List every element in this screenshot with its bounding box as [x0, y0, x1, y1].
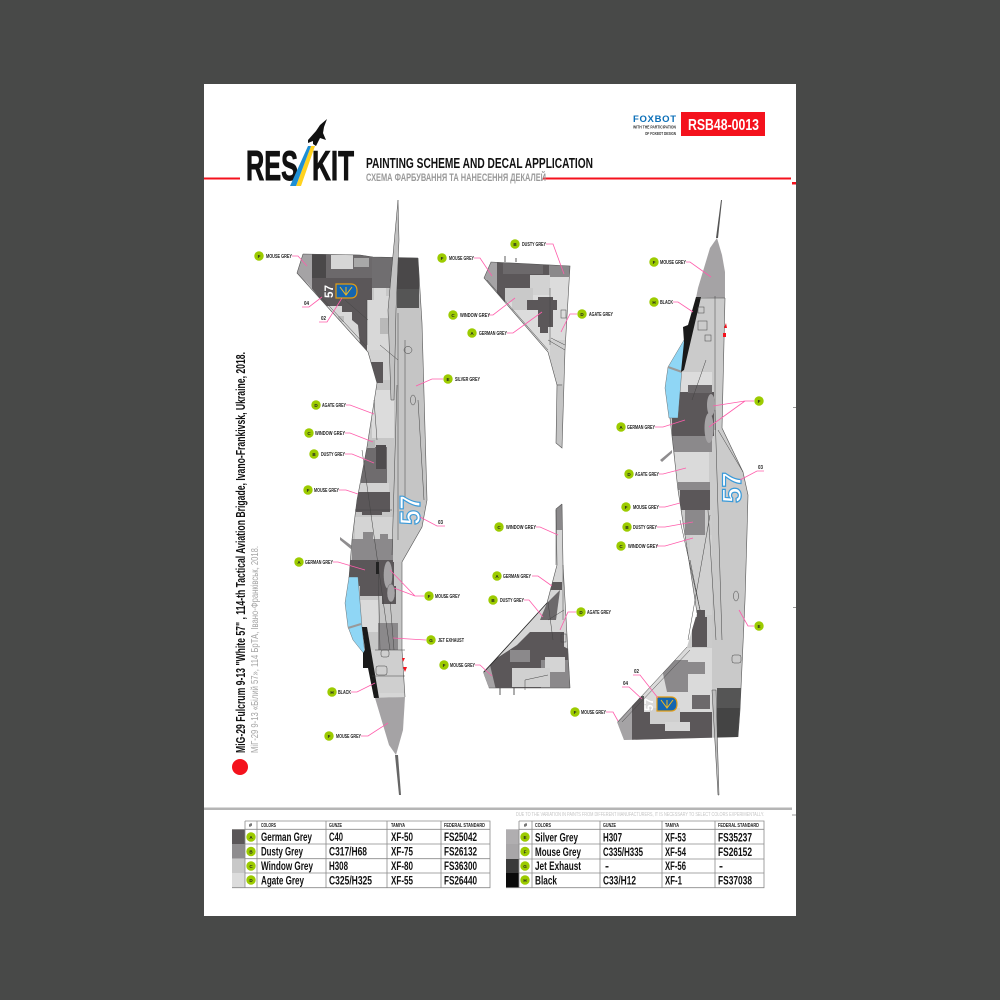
callout: F mouse grey: F [441, 256, 444, 261]
row C [246, 859, 477, 873]
row C: XF-80 [391, 859, 413, 873]
swatches [232, 829, 245, 888]
side ticks [793, 407, 796, 608]
callout: F mouse grey: F [328, 734, 331, 739]
row C: C [249, 864, 253, 869]
callout: 02: 02 [634, 669, 639, 675]
row E: Silver Grey [535, 830, 578, 844]
callout: H black: BLACK [338, 690, 351, 696]
row F [520, 845, 752, 859]
header row: FEDERAL STANDARD [718, 823, 759, 829]
row A: German Grey [261, 830, 312, 844]
page sheet [204, 84, 796, 916]
callout: A german grey: A [297, 560, 301, 565]
row E: E [523, 835, 527, 840]
icon: jet silhouette [308, 119, 327, 146]
foxbot credit: WITH THE PARTICIPATION [633, 124, 676, 130]
logo: ResKit: KIT [312, 142, 354, 189]
callout: F mouse grey: MOUSE GREY [449, 256, 474, 262]
row H: Black [535, 874, 557, 888]
row E: FS35237 [718, 830, 752, 844]
callout: D agate grey: AGATE GREY [589, 312, 613, 318]
callout: E silver grey: E [446, 377, 450, 382]
callout: C window grey: C [619, 544, 623, 549]
row A: C40 [329, 830, 343, 844]
row A: A [249, 835, 253, 840]
heading: PAINTING SCHEME AND DECAL APPLICATION [366, 156, 593, 172]
outline [484, 262, 570, 448]
callout: A german grey [492, 571, 552, 586]
header row: FEDERAL STANDARD [444, 823, 485, 829]
callout: A german grey: A [495, 574, 499, 579]
callout: H black [327, 683, 375, 697]
callout: F mouse grey [390, 570, 460, 601]
ventral fin [340, 537, 352, 550]
callout: H black: H [652, 300, 656, 305]
callout: D agate grey: AGATE GREY [635, 472, 659, 478]
callout: A german grey: A [470, 331, 474, 336]
row H: C33/H12 [603, 874, 636, 888]
callout: A german grey: GERMAN GREY [479, 331, 507, 337]
disclaimer: DUE TO THE VARIATION IN PAINTS FROM DIFFERENT MANUFACTURERS, IT IS NECESSARY TO SELECT COLORS EXPERIMENTALLY. [516, 812, 764, 818]
table: colors A-D [232, 821, 490, 888]
callout: 02 [319, 298, 342, 322]
callout: F mouse grey: MOUSE GREY [266, 254, 293, 260]
callout: F mouse grey [439, 660, 492, 676]
aircraft: bottom wing view [480, 500, 575, 695]
header row: GUNZE [329, 823, 342, 829]
callout: D agate grey: D [627, 472, 631, 477]
callout: C window grey: C [497, 525, 501, 530]
header row: # [524, 823, 527, 829]
callout: E silver grey [416, 374, 480, 386]
aircraft title: MiG-29 Fulcrum 9-13 "White 57" , 114-th Tactical Aviation Brigade, Ivano-Frankivsk, Ukraine, 2018. [233, 352, 248, 753]
callout: C window grey [448, 298, 515, 320]
row C: H308 [329, 859, 348, 873]
foxbot credit [633, 114, 676, 136]
callout: F mouse grey: F [653, 260, 656, 265]
callout: D agate grey: D [580, 312, 584, 317]
row A [246, 830, 477, 844]
callout: 04: 04 [304, 301, 309, 307]
canopy frame [348, 624, 361, 628]
callout: F mouse grey: MOUSE GREY [314, 488, 339, 494]
logo: ResKit [246, 119, 354, 189]
panel lines [618, 296, 743, 722]
logo: ResKit: RES [246, 142, 298, 189]
callout: B dusty grey: DUSTY GREY [321, 452, 345, 458]
decal trident [336, 284, 357, 298]
callout: F mouse grey: MOUSE GREY [435, 594, 460, 600]
callout: D agate grey: AGATE GREY [587, 610, 611, 616]
callout: A german grey: GERMAN GREY [503, 574, 531, 580]
callout: A german grey [616, 420, 685, 432]
outline [489, 504, 570, 688]
callout: D agate grey: D [579, 610, 583, 615]
header row: TAMIYA [391, 823, 405, 829]
row B [246, 844, 477, 858]
header row: GUNZE [603, 823, 616, 829]
callout: G jet exhaust [393, 635, 464, 645]
callout: F mouse grey [649, 257, 711, 277]
row B: XF-75 [391, 844, 413, 858]
row D: FS26440 [444, 874, 477, 888]
row D: XF-55 [391, 874, 413, 888]
header row: # [249, 823, 252, 829]
fin [712, 690, 719, 795]
decal 57 wing: 57 [395, 495, 427, 525]
callout: F mouse grey: MOUSE GREY [450, 663, 475, 669]
callout: F two arrows [709, 396, 764, 427]
callout: A german grey: GERMAN GREY [305, 560, 333, 566]
callout: F mouse grey: F [428, 594, 431, 599]
aircraft: right side view [610, 200, 755, 795]
row B: B [249, 850, 253, 854]
fin [388, 200, 399, 400]
row F: FS26152 [718, 845, 752, 859]
sub heading: СХЕМА ФАРБУВАННЯ ТА НАНЕСЕННЯ ДЕКАЛЕЙ [366, 171, 546, 184]
callout: E [739, 610, 764, 631]
callout: A german grey [467, 312, 542, 338]
row E [520, 830, 752, 844]
row D: Agate Grey [261, 874, 304, 888]
foxbot credit: FOXBOT [633, 114, 676, 125]
row B: FS26132 [444, 844, 477, 858]
callout: G jet exhaust: G [429, 638, 433, 643]
table: colors E-H [506, 821, 764, 888]
aircraft: left side view [290, 200, 430, 795]
row H: H [523, 878, 527, 883]
row D [246, 874, 477, 888]
callout: 02 [633, 669, 658, 698]
callout: C window grey: C [307, 431, 311, 436]
callout: B dusty grey: B [625, 525, 629, 530]
callout: F mouse grey: F [625, 505, 628, 510]
callout: A german grey: GERMAN GREY [627, 425, 655, 431]
callout: C window grey: WINDOW GREY [315, 431, 346, 437]
canopy frame [668, 367, 682, 372]
row C: FS36300 [444, 859, 477, 873]
callout: E silver grey: SILVER GREY [455, 377, 480, 383]
callout: D agate grey [560, 607, 611, 630]
decal trident [657, 697, 677, 711]
callout: 04 [302, 297, 322, 307]
swatches [506, 829, 519, 888]
callout: F mouse grey: F [443, 663, 446, 668]
row A: FS25042 [444, 830, 477, 844]
callout: F mouse grey: MOUSE GREY [660, 260, 687, 266]
callout: 03: 03 [438, 520, 443, 526]
callout: D agate grey: AGATE GREY [322, 403, 346, 409]
fuselage [617, 297, 748, 740]
row D: C325/H325 [329, 874, 372, 888]
row B: Dusty Grey [261, 844, 303, 858]
pitot probe [395, 755, 401, 795]
callout: F mouse grey: MOUSE GREY [336, 734, 361, 740]
callout: H black: H [330, 690, 334, 695]
fuselage outline [670, 298, 748, 737]
callout: B dusty grey [488, 595, 543, 617]
decal 57 tail: 57 [322, 285, 336, 298]
callout: C window grey [616, 538, 693, 551]
row G: - [605, 859, 609, 873]
row F: XF-54 [665, 845, 686, 859]
fuselage [290, 250, 430, 700]
callout: F two arrows: F [758, 399, 761, 404]
ventral fin [660, 450, 672, 462]
callout: 03 [420, 517, 445, 526]
callout: F mouse grey: MOUSE GREY [581, 710, 606, 716]
nose cone [375, 697, 405, 755]
row F: F [524, 850, 527, 854]
header rules [204, 178, 796, 184]
row E: XF-53 [665, 830, 686, 844]
decal 57 wing: 57 [717, 472, 747, 503]
callout: B dusty grey: B [491, 598, 495, 603]
callout: B dusty grey [510, 239, 564, 274]
callout: F mouse grey [570, 707, 618, 721]
callout: F mouse grey: F [258, 254, 261, 259]
callout: C window grey: WINDOW GREY [506, 525, 537, 531]
header row [249, 823, 485, 829]
decal 57 tail: 57 [642, 698, 656, 711]
callout: B dusty grey [309, 449, 374, 463]
row G: Jet Exhaust [535, 859, 581, 873]
callout: B dusty grey: DUSTY GREY [500, 598, 524, 604]
row F: Mouse Grey [535, 845, 581, 859]
row A: XF-50 [391, 830, 413, 844]
row F: C335/H335 [603, 845, 643, 859]
callout: F mouse grey: F [574, 710, 577, 715]
black anti-glare strip [362, 627, 379, 698]
callout: 04 [622, 681, 642, 699]
callout: B dusty grey: DUSTY GREY [633, 525, 657, 531]
callout: C window grey: C [451, 313, 455, 318]
aircraft: top wing view [484, 256, 570, 448]
callout: F mouse grey: MOUSE GREY [633, 505, 660, 511]
callout: C window grey [304, 428, 373, 442]
callout: C window grey [494, 522, 558, 535]
callout: D agate grey [561, 309, 613, 332]
product code badge [681, 112, 765, 136]
callout: B dusty grey: B [513, 242, 517, 247]
canopy [665, 340, 688, 418]
row G: - [719, 859, 723, 873]
callout: F mouse grey [621, 502, 680, 512]
row G: G [523, 864, 527, 869]
pitot probe [716, 200, 722, 238]
callout: F mouse grey [254, 251, 307, 266]
row E: H307 [603, 830, 622, 844]
panel lines [320, 296, 424, 676]
callout: F mouse grey [324, 723, 388, 741]
callout: H black: BLACK [660, 300, 673, 306]
callout: F mouse grey [437, 253, 492, 276]
callout: A german grey: A [619, 425, 623, 430]
fuselage outline [297, 254, 427, 697]
callout: C window grey: WINDOW GREY [460, 313, 491, 319]
header row: TAMIYA [665, 823, 679, 829]
foxbot credit: OF FOXBOT DESIGN [645, 131, 676, 136]
callout: F mouse grey [303, 485, 358, 495]
callout: 03: 03 [758, 465, 763, 471]
callout: B dusty grey: B [312, 452, 316, 457]
row D: D [249, 878, 253, 883]
black anti-glare strip [681, 297, 701, 372]
footer rule [204, 808, 796, 816]
header row [524, 823, 759, 829]
row G: XF-56 [665, 859, 686, 873]
callout: 02: 02 [321, 316, 326, 322]
callout: C window grey: WINDOW GREY [628, 544, 659, 550]
aircraft subtitle: МіГ-29 9-13 «Білий 57», 114 БрТА, Івано-Франківськ, 2018. [249, 546, 261, 753]
callout: 04: 04 [623, 681, 628, 687]
callout: F mouse grey: F [307, 488, 310, 493]
callout: E: E [757, 624, 761, 629]
callout: D agate grey [624, 468, 686, 479]
callout: D agate grey [311, 400, 374, 414]
callout: B dusty grey: DUSTY GREY [522, 242, 546, 248]
red marker [232, 759, 248, 775]
callout: 03 [740, 465, 764, 480]
nose cone [696, 238, 725, 298]
callout: A german grey [294, 557, 365, 570]
canopy [345, 577, 365, 655]
header row: COLORS [261, 823, 276, 829]
header row: COLORS [535, 823, 551, 829]
callout: D agate grey: D [314, 403, 318, 408]
row C: Window Grey [261, 859, 313, 873]
row H [520, 874, 752, 888]
row H: FS37038 [718, 874, 752, 888]
row B: C317/H68 [329, 844, 367, 858]
row H: XF-1 [665, 874, 682, 888]
callout: H black [649, 297, 693, 312]
product code badge: RSB48-0013 [688, 117, 759, 134]
row G [520, 859, 723, 873]
callout: B dusty grey [622, 522, 693, 532]
callout: G jet exhaust: JET EXHAUST [438, 638, 464, 644]
